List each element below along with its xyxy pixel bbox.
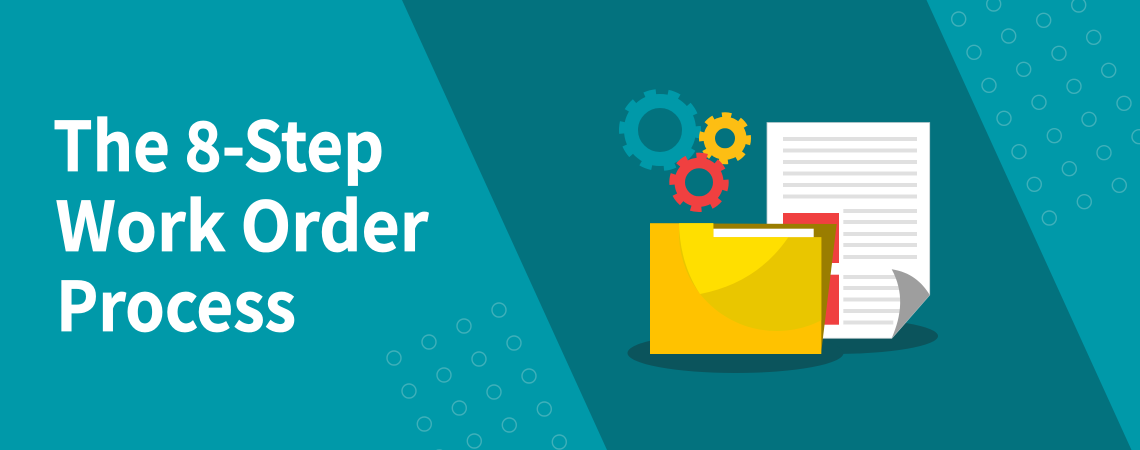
icon: red gear <box>671 154 727 211</box>
shadow: folder <box>628 333 844 373</box>
document page curl <box>892 269 930 338</box>
shadow: document <box>728 318 938 354</box>
title: The 8-Step <box>53 92 384 191</box>
title: Process <box>56 252 296 351</box>
icon: yellow gear <box>700 113 750 164</box>
folder highlight <box>679 223 788 294</box>
document images <box>783 213 839 325</box>
dot pattern: bottom left <box>387 303 566 450</box>
document page <box>767 122 930 338</box>
folder back <box>650 223 837 354</box>
dark diagonal band <box>402 0 1132 450</box>
document text lines: side <box>843 209 917 324</box>
title: Work Order <box>56 172 429 271</box>
folder <box>650 223 837 354</box>
folder front <box>650 223 821 354</box>
title <box>53 92 429 351</box>
document text lines: top <box>783 137 917 198</box>
folder shade <box>679 223 822 331</box>
document <box>767 122 930 338</box>
illustration: work order folder, document and gears <box>611 81 938 373</box>
dot pattern: top right <box>952 0 1140 225</box>
folder paper strip <box>713 229 814 238</box>
icon: teal gear <box>611 81 709 179</box>
